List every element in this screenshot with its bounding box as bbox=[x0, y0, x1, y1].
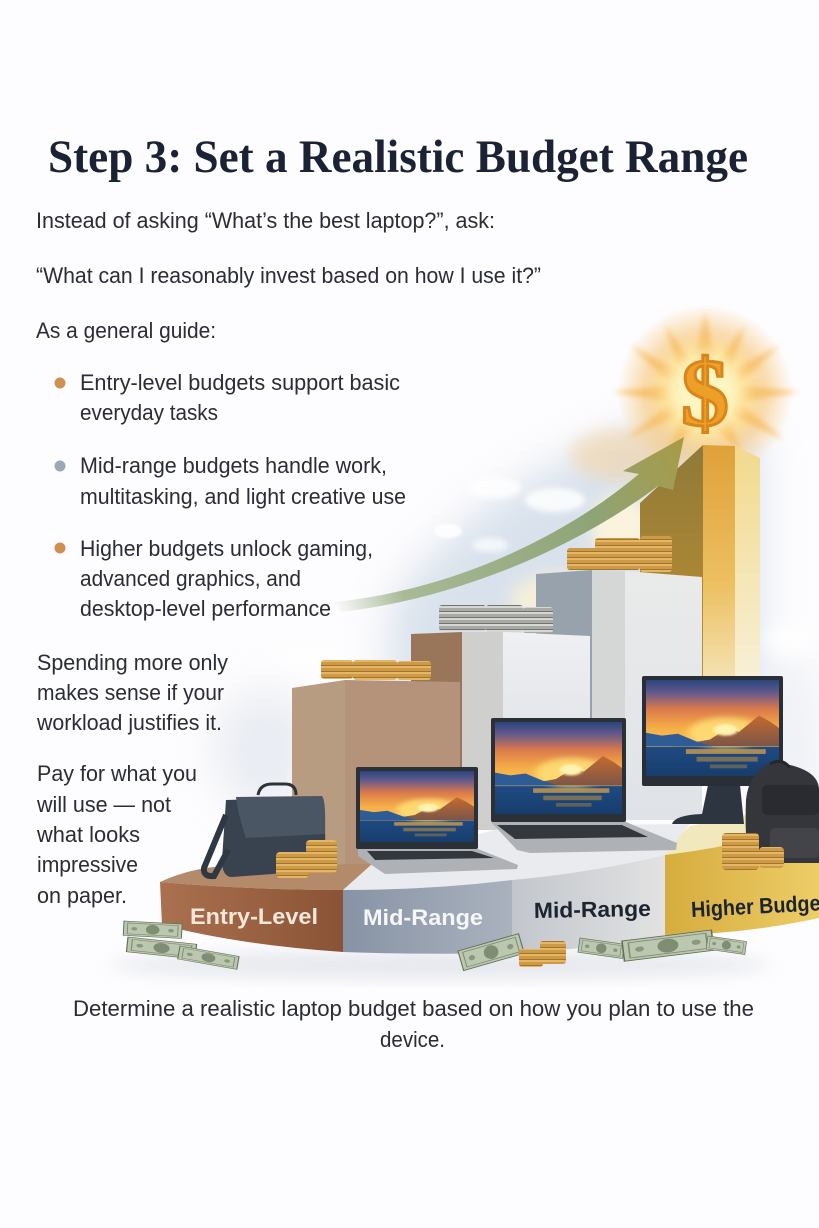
title: Step 3: Set a Realistic Budget Range bbox=[48, 131, 748, 183]
mid block bbox=[411, 632, 590, 830]
sunburst bbox=[612, 305, 800, 481]
caption bbox=[73, 996, 754, 1052]
cash pile left bbox=[123, 921, 239, 969]
bullet: higher budgets: advanced graphics, and bbox=[80, 566, 301, 591]
illustration: budget staircase bbox=[110, 305, 819, 979]
side note: spending: Spending more only bbox=[37, 650, 228, 675]
segment: higher budget bbox=[665, 822, 819, 935]
segment: mid-range two bbox=[512, 855, 665, 953]
icon: messenger bag bbox=[204, 784, 325, 877]
bullet list bbox=[54, 370, 406, 621]
platform shadow bbox=[110, 951, 770, 979]
cash pile right bbox=[578, 930, 747, 961]
entry laptop bbox=[356, 767, 518, 874]
bullet: higher budgets: desktop-level performance bbox=[80, 596, 331, 621]
stepped platform bbox=[110, 800, 819, 979]
bullet: mid-range bbox=[54, 453, 406, 509]
bullet: entry-level: Entry-level budgets support basic bbox=[80, 370, 400, 395]
bullet: mid-range: Mid-range budgets handle work, bbox=[80, 453, 387, 478]
bullet: entry-level: everyday tasks bbox=[80, 400, 218, 425]
coins on silver block bbox=[567, 536, 672, 572]
side note: pay for use: impressive bbox=[37, 852, 138, 877]
side note: spending bbox=[36, 650, 228, 735]
cloudy sky backdrop bbox=[215, 429, 819, 870]
coins on entry block bbox=[321, 660, 431, 680]
guide lead-in: As a general guide: bbox=[36, 318, 216, 343]
side note: pay for use: will use — not bbox=[36, 792, 171, 817]
entry block bbox=[292, 680, 460, 880]
silver block bbox=[536, 570, 702, 820]
side note: spending: workload justifies it. bbox=[36, 710, 222, 735]
bullet: higher budgets: Higher budgets unlock gaming, bbox=[80, 536, 373, 561]
intro text block bbox=[36, 208, 541, 343]
gold column bbox=[640, 445, 760, 680]
desktop monitor bbox=[642, 676, 783, 824]
segment: mid-range two: Mid-Range bbox=[534, 896, 651, 923]
coins beside backpack bbox=[722, 833, 784, 870]
coins on mid block bbox=[439, 605, 553, 633]
side note: pay for use: on paper. bbox=[37, 883, 127, 908]
icon: backpack bbox=[746, 761, 819, 863]
side note: pay for use bbox=[36, 761, 197, 908]
reframed question: “What can I reasonably invest based on how I use it?” bbox=[36, 263, 541, 288]
segment: entry-level: Entry-Level bbox=[190, 904, 318, 929]
coins beside messenger bag bbox=[276, 840, 337, 878]
mid-range laptop bbox=[491, 718, 677, 853]
side note: spending: makes sense if your bbox=[37, 680, 224, 705]
segment: mid-range one bbox=[343, 880, 512, 954]
dollar sign: $ bbox=[681, 339, 729, 446]
segment: mid-range one: Mid-Range bbox=[363, 905, 483, 930]
segment: entry-level bbox=[160, 882, 343, 952]
bullet: higher budgets bbox=[54, 536, 373, 621]
bullet: entry-level bbox=[54, 370, 400, 425]
bullet: mid-range: multitasking, and light creative use bbox=[80, 484, 406, 509]
side note: pay for use: what looks bbox=[36, 822, 140, 847]
side note: pay for use: Pay for what you bbox=[37, 761, 197, 786]
platform tops bbox=[662, 800, 819, 855]
caption: Determine a realistic laptop budget based on how you plan to use the bbox=[73, 996, 754, 1021]
caption: device. bbox=[380, 1027, 445, 1052]
cash and coins centre bbox=[458, 934, 566, 971]
growth arrow bbox=[335, 437, 684, 612]
intro question: Instead of asking “What’s the best laptop?”, ask: bbox=[36, 208, 495, 233]
